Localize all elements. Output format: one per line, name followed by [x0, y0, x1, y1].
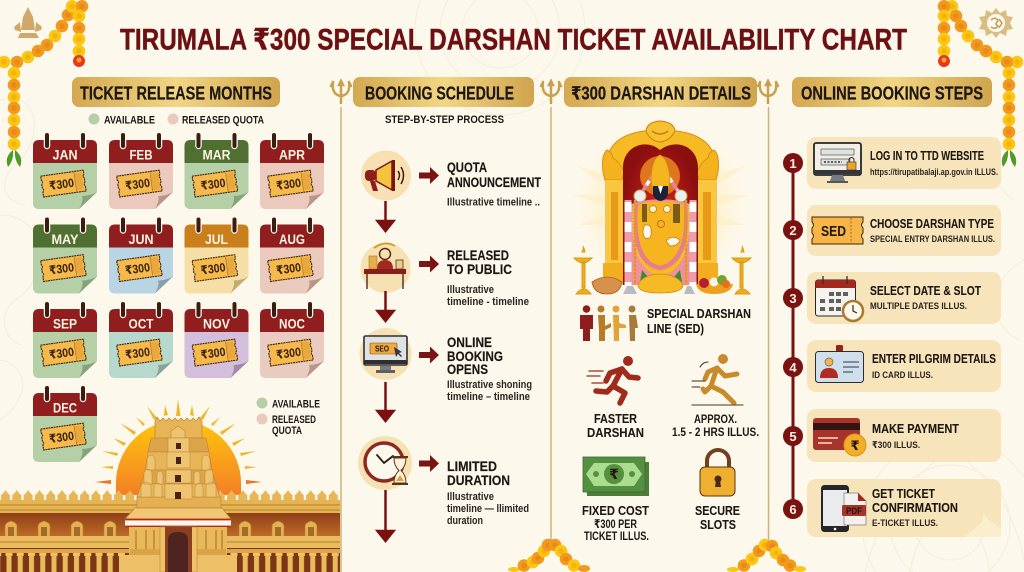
- calendar: NOC: [260, 304, 324, 378]
- heading: online booking steps: ONLINE BOOKING STEPS: [801, 84, 983, 104]
- number 5: [783, 426, 803, 446]
- heading: booking schedule: BOOKING SCHEDULE: [365, 84, 514, 104]
- text: step 2: SPECIAL ENTRY DARSHAN ILLUS.: [870, 234, 995, 245]
- text: special darshan line: LINE (SED): [647, 322, 704, 336]
- divider and trident: left: [331, 81, 351, 572]
- calendar: MAR: [184, 135, 248, 209]
- calendar: JAN: [33, 135, 97, 209]
- heading: booking schedule: [353, 77, 534, 107]
- arrow: right: [419, 256, 439, 272]
- step 4: [783, 340, 1001, 392]
- feature: approx time: [672, 356, 759, 439]
- text: step 4: ID CARD ILLUS.: [872, 370, 933, 381]
- number 5: 5: [789, 429, 797, 444]
- number 3: 3: [789, 291, 797, 306]
- icon: card and coin: [813, 418, 866, 456]
- text: quota announcement: Illustrative timeline ..: [447, 196, 540, 208]
- text: step 4: ENTER PILGRIM DETAILS: [872, 352, 996, 366]
- step 1: [783, 137, 1001, 189]
- text: limited duration: timeline — llimited: [447, 503, 529, 515]
- text: step 6: GET TICKET: [872, 487, 935, 501]
- text: step 1: [870, 149, 998, 178]
- calendar: NOC: ₹300: [275, 345, 302, 362]
- icon: monitor with SEO ticket: [360, 328, 412, 380]
- text: limited duration: DURATION: [447, 472, 510, 488]
- arrow: right: [419, 346, 439, 364]
- calendar: OCT: OCT: [128, 316, 154, 332]
- text: step 1: LOG IN TO TTD WEBSITE: [870, 149, 984, 163]
- arrow: right: [419, 455, 439, 472]
- step: online booking opens: [360, 328, 532, 421]
- text: step 3: [870, 284, 981, 312]
- text: step 3: SELECT DATE & SLOT: [870, 284, 981, 298]
- legend: lower: AVAILABLE: [272, 398, 320, 410]
- calendar: JAN: JAN: [52, 148, 78, 164]
- legend: lower: [256, 398, 320, 437]
- calendar: AUG: [260, 220, 324, 294]
- icon: SED ticket: SED: [821, 223, 846, 240]
- panel: ticket release months: [0, 77, 340, 572]
- calendar: DEC: DEC: [53, 400, 77, 416]
- text: step 6: E-TICKET ILLUS.: [872, 518, 938, 529]
- panel: darshan details: [564, 77, 759, 543]
- icon: om star emblem: [979, 8, 1013, 38]
- icon: phone and PDF: [821, 485, 866, 532]
- calendar: DEC: ₹300: [48, 429, 75, 446]
- calendar: JUN: ₹300: [124, 260, 151, 278]
- number 2: 2: [789, 223, 797, 238]
- step 5: [783, 409, 1001, 462]
- subheading: STEP-BY-STEP PROCESS: [385, 114, 504, 126]
- text: step 3: MULTIPLE DATES ILLUS.: [870, 301, 967, 312]
- calendar: MAR: MAR: [202, 148, 230, 164]
- panel: booking schedule: [353, 77, 541, 541]
- text: released to public: TO PUBLIC: [447, 261, 512, 277]
- panel: online booking steps: [783, 77, 1001, 537]
- text: secure slots: SECURE: [695, 504, 740, 518]
- garland: bottom centre right: [727, 539, 806, 572]
- divider and trident: right: [758, 81, 778, 540]
- icon: gold runner: [692, 356, 743, 405]
- calendar: JUN: [109, 220, 173, 294]
- step: limited duration: [358, 436, 529, 541]
- calendar: JUL: ₹300: [200, 260, 227, 278]
- text: online booking opens: Illustrative shoning: [447, 379, 532, 391]
- number 1: [783, 153, 803, 173]
- garland: top right: [938, 0, 1023, 167]
- icon: clock and hourglass: [358, 436, 412, 490]
- arrow: down: [378, 382, 394, 421]
- step 6: [783, 479, 1001, 537]
- calendar: JUL: [184, 220, 248, 294]
- icon: megaphone: [361, 150, 411, 200]
- heading: ticket release months: TICKET RELEASE MONTHS: [80, 84, 272, 104]
- text: quota announcement: QUOTA: [447, 159, 487, 175]
- text: online booking opens: ONLINE: [447, 334, 492, 350]
- legend: lower: QUOTA: [272, 425, 302, 437]
- calendar: SEP: [33, 304, 97, 378]
- text: fixed cost: [582, 504, 649, 543]
- text: fixed cost: TICKET ILLUS.: [584, 529, 649, 543]
- calendar: APR: ₹300: [275, 176, 302, 193]
- legend: lower: RELEASED: [272, 414, 316, 426]
- arrow: down: [378, 490, 394, 541]
- feature: faster darshan: [587, 358, 644, 440]
- calendar: MAY: ₹300: [48, 260, 75, 278]
- step: quota announcement: [361, 150, 541, 231]
- calendar: JUL: JUL: [205, 232, 228, 248]
- step 3: [783, 272, 1001, 324]
- calendar: SEP: ₹300: [48, 345, 75, 362]
- text: released to public: RELEASED: [447, 247, 509, 263]
- icon: login monitor: [814, 143, 861, 183]
- icon: desk with person: [360, 243, 410, 293]
- text: step 5: MAKE PAYMENT: [872, 422, 959, 436]
- step 2: [783, 205, 1001, 256]
- icon: queue of people: [580, 305, 638, 341]
- calendar: DEC: [33, 388, 97, 462]
- text: quota announcement: ANNOUNCEMENT: [447, 174, 541, 190]
- calendar: APR: [260, 135, 324, 209]
- icon: calendar and clock: [816, 276, 863, 321]
- text: approx time: [672, 412, 759, 439]
- number 3: [783, 288, 803, 308]
- text: approx time: 1.5 - 2 HRS ILLUS.: [672, 425, 759, 439]
- text: online booking opens: OPENS: [447, 361, 488, 377]
- number 6: 6: [789, 502, 797, 517]
- text: released to public: timeline - timeline: [447, 296, 529, 308]
- icon: monitor with SEO ticket: SEO: [375, 344, 389, 354]
- calendar: NOV: [184, 304, 248, 378]
- text: released to public: [447, 247, 529, 308]
- icon: SED ticket: [812, 217, 863, 244]
- text: fixed cost: ₹300 PER: [594, 517, 637, 531]
- text: limited duration: Illustrative: [447, 491, 494, 503]
- text: step 2: CHOOSE DARSHAN TYPE: [870, 217, 994, 231]
- calendar: NOC: NOC: [279, 316, 305, 332]
- text: limited duration: [447, 458, 529, 527]
- legend: top: AVAILABLE: [104, 114, 155, 126]
- heading: darshan details: [564, 77, 757, 107]
- calendar: OCT: ₹300: [124, 345, 151, 362]
- icon: phone and PDF: PDF: [846, 506, 862, 516]
- calendar: FEB: ₹300: [124, 176, 151, 193]
- illustration: deity in golden arch: [569, 113, 753, 297]
- feature: fixed cost: [582, 457, 649, 543]
- calendar: NOV: NOV: [203, 316, 230, 332]
- icon: temple emblem: [14, 7, 42, 38]
- heading: ticket release months: [72, 77, 280, 107]
- icon: padlock: [700, 450, 735, 496]
- icon: ID card: [816, 345, 864, 382]
- icon: banknotes: ₹: [609, 466, 619, 482]
- calendar: MAY: MAY: [52, 232, 79, 248]
- text: online booking opens: [447, 334, 532, 403]
- divider and trident: centre: [541, 81, 561, 540]
- text: faster darshan: DARSHAN: [587, 426, 644, 440]
- text: online booking opens: timeline – timeline: [447, 391, 530, 403]
- text: secure slots: [695, 504, 740, 532]
- icon: card and coin: ₹: [850, 438, 860, 453]
- arrow: down: [378, 291, 394, 321]
- icon: red runner: [587, 358, 638, 403]
- text: secure slots: SLOTS: [700, 518, 736, 532]
- calendar: FEB: [109, 135, 173, 209]
- number 2: [783, 220, 803, 240]
- timeline line: [792, 165, 794, 510]
- text: step 6: CONFIRMATION: [872, 501, 958, 515]
- text: step 5: [872, 422, 959, 451]
- feature: secure slots: [695, 450, 740, 532]
- garland: top left: [0, 0, 88, 167]
- heading: online booking steps: [792, 77, 992, 107]
- number 1: 1: [789, 156, 797, 171]
- calendar: MAY: [33, 220, 97, 294]
- calendar: AUG: AUG: [279, 232, 305, 248]
- garland: bottom centre left: [508, 539, 590, 572]
- number 6: [783, 499, 803, 519]
- legend: top: [88, 114, 264, 126]
- calendar: JAN: ₹300: [48, 176, 75, 193]
- number 4: [783, 357, 803, 377]
- illustration: temple gopuram with sun: [0, 399, 340, 572]
- calendar: NOV: ₹300: [200, 345, 227, 362]
- legend: top: RELEASED QUOTA: [182, 114, 264, 126]
- arrow: down: [378, 201, 394, 231]
- calendar: SEP: SEP: [53, 316, 77, 332]
- text: special darshan line: [647, 307, 751, 336]
- text: limited duration: duration: [447, 515, 483, 527]
- step: released to public: [360, 243, 529, 321]
- text: approx time: APPROX.: [694, 412, 737, 426]
- text: quota announcement: [447, 159, 541, 208]
- text: special darshan line: SPECIAL DARSHAN: [647, 307, 751, 321]
- heading: darshan details: ₹300 DARSHAN DETAILS: [571, 84, 751, 104]
- calendar: JUN: JUN: [128, 232, 154, 248]
- calendar: APR: APR: [279, 148, 305, 164]
- text: step 2: [870, 217, 995, 245]
- text: released to public: Illustrative: [447, 284, 494, 296]
- calendar: AUG: ₹300: [275, 260, 302, 278]
- text: online booking opens: BOOKING: [447, 348, 503, 364]
- calendar: MAR: ₹300: [200, 176, 227, 193]
- calendar: FEB: FEB: [130, 148, 152, 164]
- calendar: OCT: [109, 304, 173, 378]
- text: fixed cost: FIXED COST: [582, 504, 649, 518]
- text: step 6: [872, 487, 958, 529]
- text: faster darshan: FASTER: [594, 412, 637, 426]
- number 4: 4: [789, 360, 797, 375]
- text: step 4: [872, 352, 996, 381]
- text: faster darshan: [587, 412, 644, 440]
- text: step 5: ₹300 ILLUS.: [872, 440, 920, 451]
- arrow: right: [419, 167, 439, 184]
- text: limited duration: LIMITED: [447, 458, 497, 474]
